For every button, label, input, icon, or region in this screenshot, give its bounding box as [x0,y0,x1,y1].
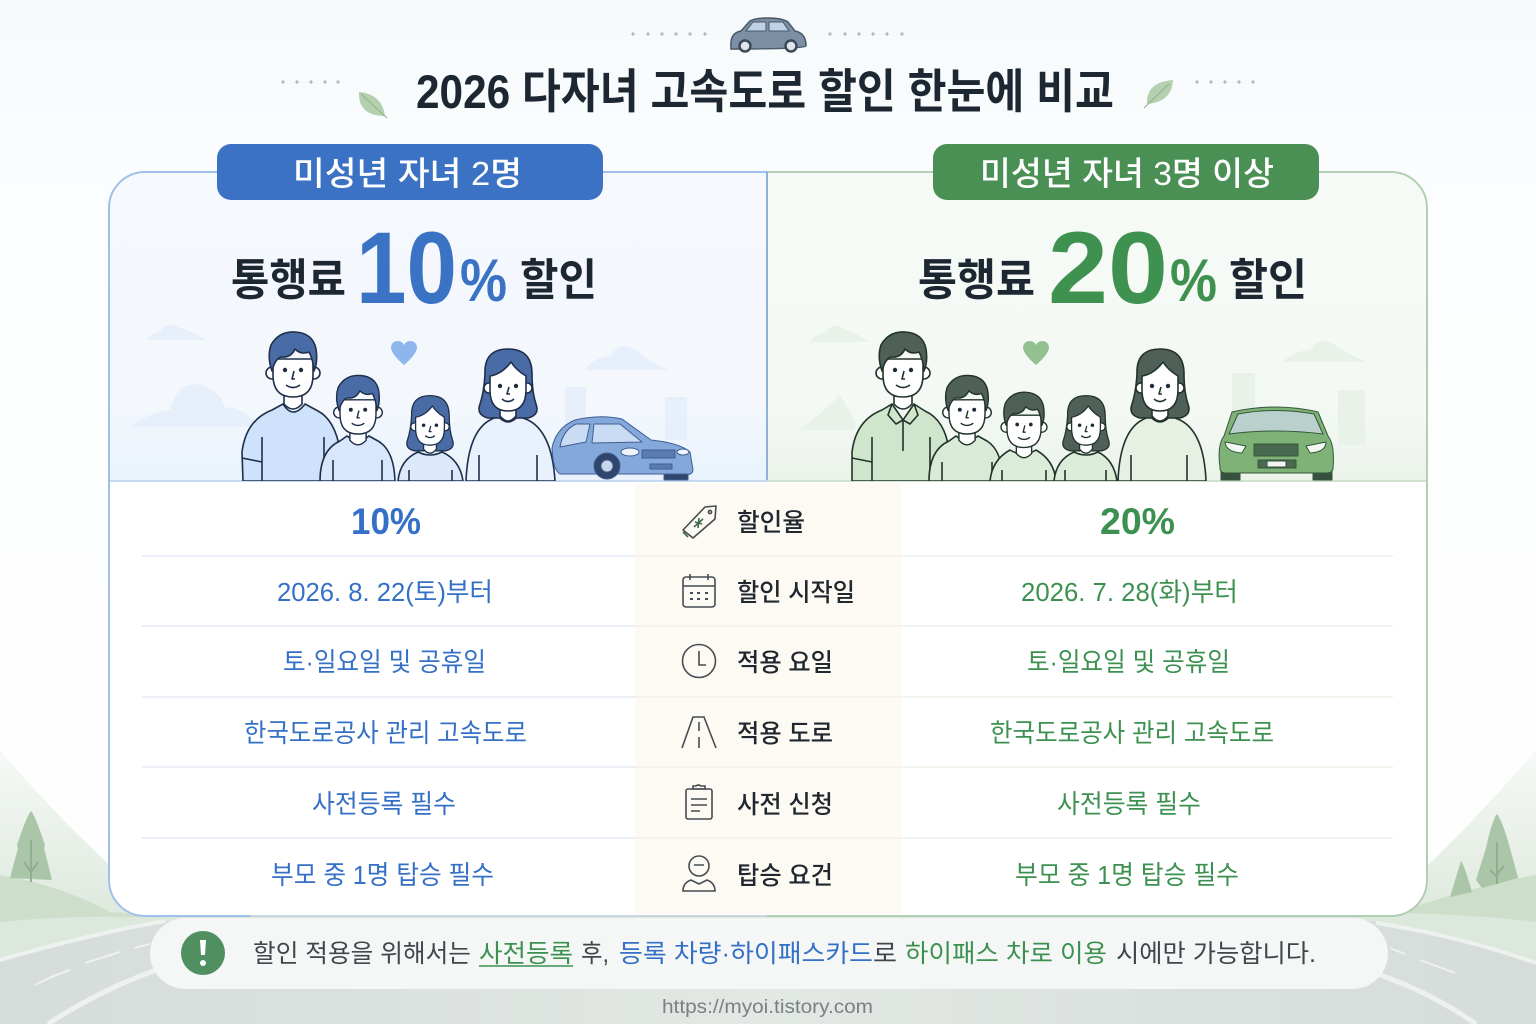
mother [1118,349,1206,481]
heading: 10 percent discount: 통행료 [231,256,346,305]
notice text: 할인 적용을 위해서는 [253,940,471,968]
icon: price tag [683,506,716,538]
card borders [109,172,1427,916]
notice text: 로 [873,940,897,968]
car: front view [1219,407,1333,480]
son [320,375,395,481]
car: side view [552,417,693,480]
notice text: 후, [581,940,609,968]
icon: right trees [1450,814,1518,897]
icon: calendar [683,574,715,607]
table: row labels [737,509,855,890]
source url: https://myoi.tistory.com [662,997,873,1018]
panel: two children background [109,172,767,481]
notice text: 하이패스 차로 이용 [905,940,1107,968]
icon: clipboard [686,785,712,819]
son one [929,375,1003,481]
table: three children values: 20% [1100,501,1175,542]
heading: 10 percent discount [231,211,597,325]
icon: green heart [1023,341,1049,365]
notice text: 등록 차량·하이패스카드 [619,940,873,968]
scenery: mountains, hills and road [0,750,1536,1024]
table: row labels: 사전 신청 [737,791,833,819]
title decoration left [281,80,387,118]
badge: two children [217,144,603,200]
icon: exclamation [181,931,225,975]
table: three children values [990,501,1274,890]
comparison card [109,172,1427,916]
heading: 20 percent discount: % [1170,247,1217,314]
notice text: 사전등록 [479,940,573,968]
top car icon with dotted lines [631,18,904,52]
table: row labels: 할인율 [737,509,805,537]
table: row labels: 탑승 요건 [737,862,833,890]
heading: 20 percent discount: 20 [1048,211,1168,325]
heading: 20 percent discount [918,211,1307,325]
table: three children values: 부모 중 1명 탑승 필수 [1015,860,1239,890]
heading: 20 percent discount: 할인 [1229,256,1307,305]
title: 2026 다자녀 고속도로 할인 한눈에 비교 [416,65,1114,118]
notice text: 시에만 가능합니다. [1116,940,1316,968]
table: two children values [244,501,527,890]
table: two children values: 부모 중 1명 탑승 필수 [271,860,494,890]
table: three children values: 한국도로공사 관리 고속도로 [990,718,1274,748]
badge: three or more children [933,144,1319,200]
table: row labels: 적용 도로 [737,720,833,748]
badge: two children: 미성년 자녀 2명 [293,155,522,192]
daughter [1054,396,1117,481]
heading: 10 percent discount: 10 [356,211,457,325]
center label column background [635,483,901,914]
heading: 10 percent discount: % [460,247,507,314]
family illustration: three children [852,332,1333,481]
notice bar [150,918,1388,989]
icon: road [682,717,716,748]
icon: left tree [10,811,52,882]
heading: 10 percent discount: 할인 [520,256,597,305]
table: three children values: 2026. 7. 28(화)부터 [1021,577,1238,607]
panel: three children background [767,172,1427,481]
badge: three or more children: 미성년 자녀 3명 이상 [980,155,1274,192]
son two [990,392,1056,481]
heading: 20 percent discount: 통행료 [918,256,1035,305]
daughter [398,396,463,481]
family illustration: two children [242,332,693,481]
table: three children values: 사전등록 필수 [1057,789,1201,819]
row separators [142,556,1393,838]
table: two children values: 사전등록 필수 [312,789,456,819]
icon: blue heart [391,341,417,365]
table: two children values: 토·일요일 및 공휴일 [283,647,486,677]
table: three children values: 토·일요일 및 공휴일 [1027,647,1230,677]
icon: person [683,856,715,891]
table: two children values: 한국도로공사 관리 고속도로 [244,718,527,748]
table: row labels: 적용 요일 [737,649,833,677]
father [242,332,340,481]
father [852,332,949,481]
mother [466,349,555,481]
table: two children values: 10% [351,501,421,542]
title decoration right [1144,80,1255,108]
table: row labels: 할인 시작일 [737,579,855,607]
icon: clock [682,644,716,678]
notice text [253,940,1316,968]
table: two children values: 2026. 8. 22(토)부터 [277,577,493,607]
